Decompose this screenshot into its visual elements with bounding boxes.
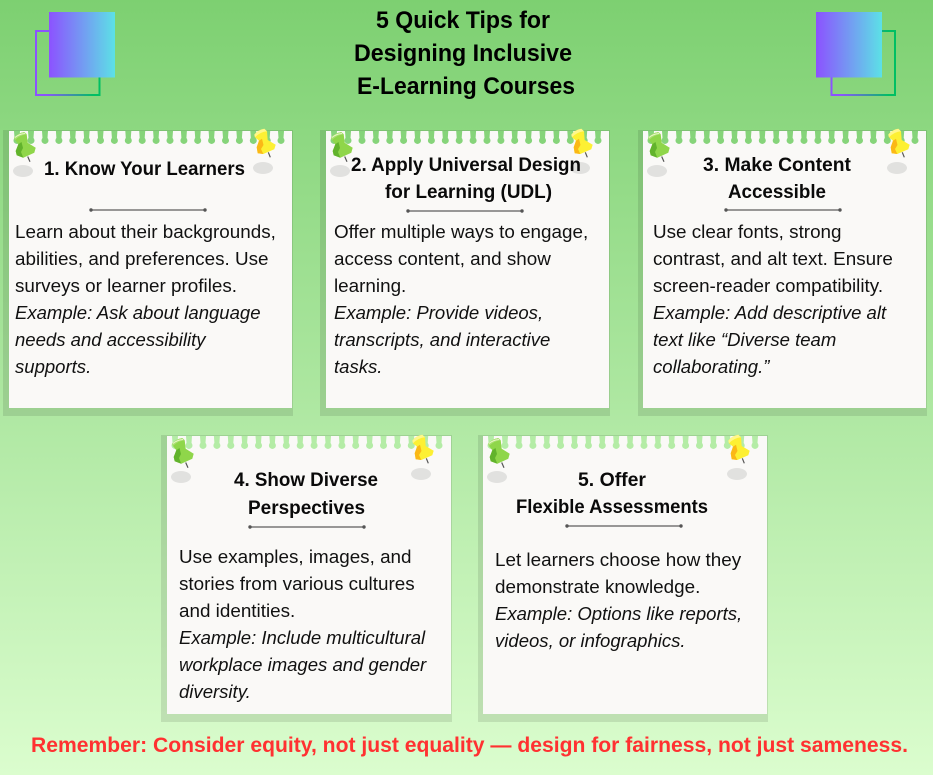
- body: tip 4: diversity.: [179, 681, 251, 702]
- body: tip 3: [653, 221, 893, 377]
- heading: tip 3: Accessible: [728, 182, 826, 203]
- heading: tip 2: [351, 155, 581, 203]
- heading: tip 4: [234, 470, 378, 519]
- heading: tip 5: [516, 470, 708, 518]
- panel: tip 1: [3, 129, 293, 416]
- body: tip 5: Let learners choose how they: [495, 549, 742, 570]
- body: tip 1: Example: Ask about language: [15, 302, 261, 323]
- title: E-Learning Courses: [357, 73, 575, 100]
- body: tip 3: collaborating.”: [653, 356, 770, 377]
- heading: tip 5: 5. Offer: [578, 470, 647, 491]
- body: tip 1: needs and accessibility: [15, 329, 207, 350]
- body: tip 3: Use clear fonts, strong: [653, 221, 842, 242]
- title: 5 Quick Tips for: [376, 7, 550, 34]
- body: tip 5: demonstrate knowledge.: [495, 576, 700, 597]
- heading: tip 4: Perspectives: [248, 498, 365, 519]
- body: tip 4: Example: Include multicultural: [179, 627, 426, 648]
- body: tip 4: stories from various cultures: [179, 573, 415, 594]
- body: tip 4: Use examples, images, and: [179, 546, 412, 567]
- panel: tip 4: [161, 435, 452, 722]
- body: tip 2: learning.: [334, 275, 406, 296]
- body: tip 2: tasks.: [334, 356, 382, 377]
- heading: tip 4: 4. Show Diverse: [234, 470, 378, 491]
- body: tip 2: transcripts, and interactive: [334, 329, 550, 350]
- body: tip 2: Example: Provide videos,: [334, 302, 543, 323]
- panel: tip 5: [478, 435, 768, 722]
- body: tip 1: [15, 221, 276, 377]
- body: tip 1: abilities, and preferences. Use: [15, 248, 268, 269]
- closing reminder: Remember: Consider equity, not just equality — design for fairness, not just sameness.: [31, 734, 908, 757]
- body: tip 1: supports.: [15, 356, 91, 377]
- body: tip 5: [495, 549, 742, 651]
- body: tip 5: videos, or infographics.: [495, 630, 686, 651]
- heading: tip 2: 2. Apply Universal Design: [351, 155, 581, 176]
- body: tip 4: [179, 546, 427, 702]
- title: [354, 7, 575, 100]
- body: tip 1: surveys or learner profiles.: [15, 275, 237, 296]
- body: tip 5: Example: Options like reports,: [495, 603, 742, 624]
- body: tip 4: workplace images and gender: [179, 654, 427, 675]
- panel: tip 3: [638, 129, 927, 416]
- body: tip 3: screen-reader compatibility.: [653, 275, 883, 296]
- body: tip 3: Example: Add descriptive alt: [653, 302, 887, 323]
- body: tip 4: and identities.: [179, 600, 295, 621]
- heading: tip 5: Flexible Assessments: [516, 497, 708, 518]
- body: tip 3: contrast, and alt text. Ensure: [653, 248, 893, 269]
- heading: tip 2: for Learning (UDL): [385, 182, 552, 203]
- body: tip 2: [334, 221, 588, 377]
- body: tip 1: Learn about their backgrounds,: [15, 221, 276, 242]
- heading: tip 1: 1. Know Your Learners: [44, 159, 245, 180]
- title: Designing Inclusive: [354, 40, 572, 67]
- body: tip 2: Offer multiple ways to engage,: [334, 221, 588, 242]
- body: tip 2: access content, and show: [334, 248, 551, 269]
- decoration: top right squares: [816, 12, 895, 95]
- body: tip 3: text like “Diverse team: [653, 329, 836, 350]
- heading: tip 3: 3. Make Content: [703, 155, 852, 176]
- heading: tip 3: [703, 155, 852, 203]
- decoration: top left squares: [36, 12, 115, 95]
- panel: tip 2: [320, 129, 610, 416]
